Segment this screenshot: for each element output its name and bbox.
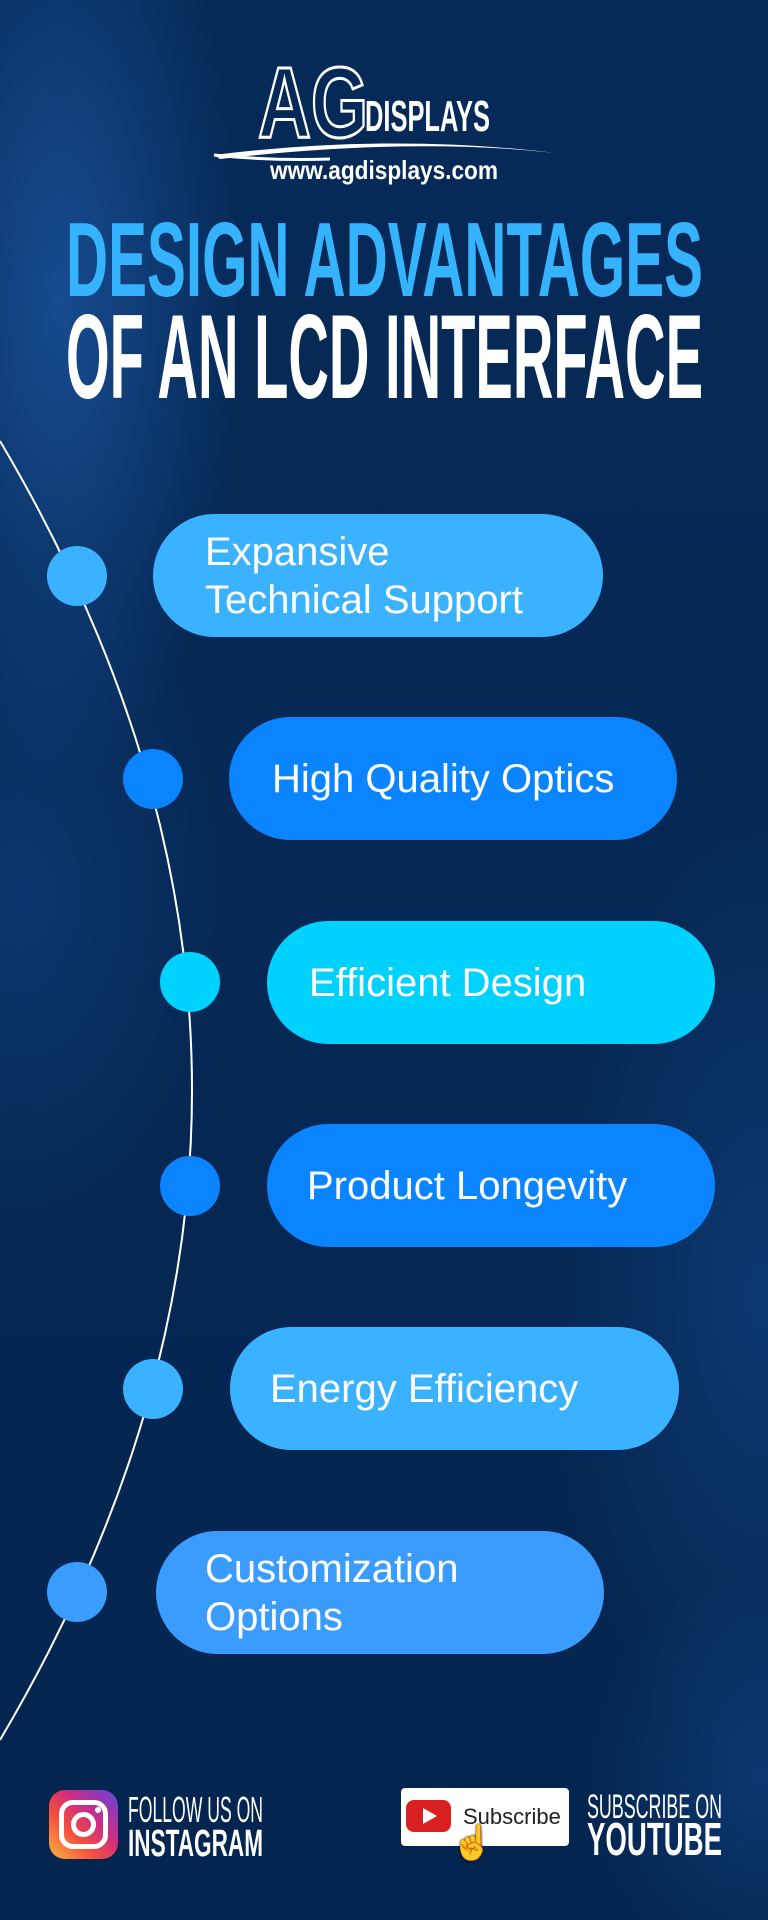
pill 1 (153, 514, 603, 637)
subscribe button: Subscribe (463, 1804, 561, 1829)
dot 4 (160, 1156, 220, 1216)
pill 4: Product Longevity (307, 1164, 627, 1208)
pill 6: Options (205, 1594, 343, 1638)
logo (214, 55, 555, 185)
pill 3: Efficient Design (309, 960, 586, 1004)
pill 5: Energy Efficiency (270, 1366, 578, 1410)
logo: www.agdisplays.com (269, 155, 498, 185)
subscribe button: ☝ (451, 1824, 493, 1862)
dot 1 (47, 546, 107, 606)
dot 5 (123, 1359, 183, 1419)
pill 5 (230, 1327, 679, 1450)
pill 6 (156, 1531, 604, 1654)
youtube text (587, 1788, 722, 1858)
pill 2: High Quality Optics (272, 756, 614, 800)
pill 1: Expansive (205, 530, 390, 574)
pill 3 (267, 921, 715, 1044)
pill 1: Technical Support (205, 578, 523, 622)
dot 2 (123, 749, 183, 809)
subscribe button (401, 1788, 569, 1846)
pill 2 (229, 717, 677, 840)
pill 6: Customization (205, 1546, 458, 1590)
dot 6 (47, 1562, 107, 1622)
instagram text (128, 1790, 263, 1860)
icon: instagram (49, 1790, 118, 1859)
dot 3 (160, 952, 220, 1012)
pill 4 (267, 1124, 715, 1247)
title (66, 210, 703, 410)
